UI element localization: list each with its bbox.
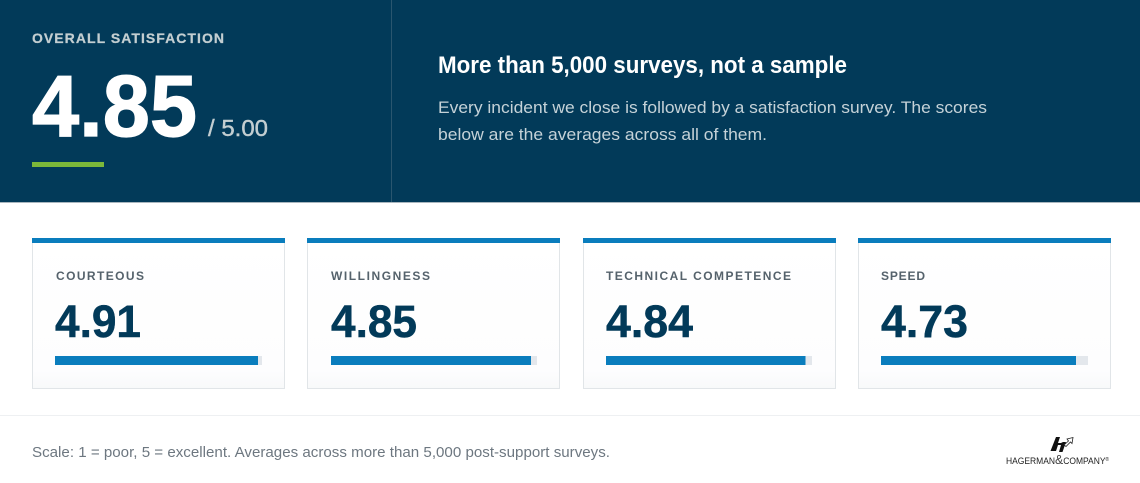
description heading: More than 5,000 surveys, not a sample — [438, 52, 847, 79]
courteous label: COURTEOUS — [56, 269, 144, 283]
courteous score bar — [55, 356, 262, 365]
panel: speed card — [858, 238, 1111, 388]
panel: overall score — [32, 30, 268, 167]
panel: header banner — [0, 0, 1140, 203]
footer scale note: Scale: 1 = poor, 5 = excellent. Averages across more than 5,000 post-support surveys. — [32, 444, 610, 461]
description text — [438, 98, 987, 144]
technical competence label: TECHNICAL COMPETENCE — [606, 269, 791, 283]
panel: willingness card — [307, 238, 560, 388]
courteous score: 4.91 — [55, 296, 141, 347]
description text: Every incident we close is followed by a satisfaction survey. The scores — [438, 98, 987, 117]
speed score: 4.73 — [881, 296, 968, 347]
panel: survey description — [438, 52, 987, 144]
technical competence score bar — [606, 356, 812, 365]
logo wordmark: HAGERMAN&COMPANY — [1006, 452, 1108, 467]
willingness score: 4.85 — [331, 296, 417, 347]
technical competence score: 4.84 — [606, 296, 693, 347]
willingness label: WILLINGNESS — [331, 269, 430, 283]
overall score value: 4.85 — [32, 58, 197, 155]
speed score bar — [881, 356, 1088, 365]
panel: courteous card — [32, 238, 285, 388]
logo wordmark: ® — [1106, 456, 1109, 463]
willingness score bar — [331, 356, 537, 365]
logo: Hagerman and Company — [1006, 437, 1109, 467]
score maximum: / 5.00 — [208, 115, 268, 141]
green accent bar — [32, 162, 104, 167]
panel: technical competence card — [583, 238, 836, 388]
speed label: SPEED — [881, 269, 925, 283]
overall satisfaction label: OVERALL SATISFACTION — [32, 30, 224, 46]
description text: below are the averages across all of them. — [438, 125, 767, 144]
icon: logo mark — [1050, 437, 1073, 452]
